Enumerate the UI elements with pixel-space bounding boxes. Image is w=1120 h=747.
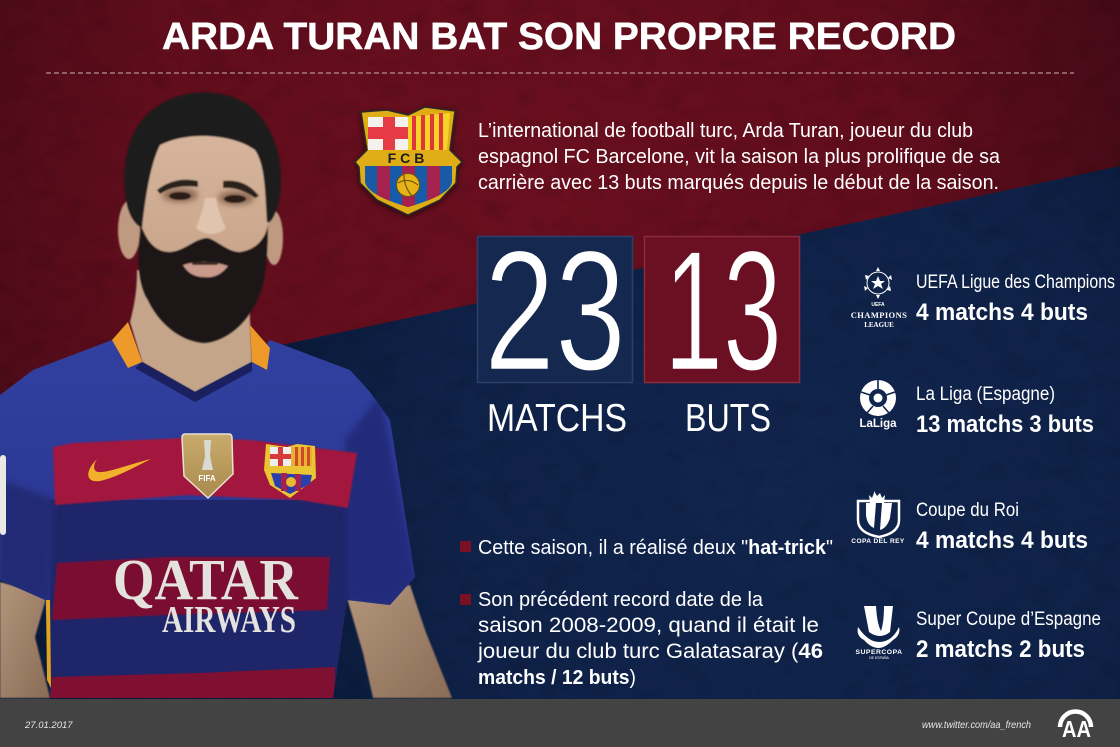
jersey (0, 340, 415, 700)
jersey side trim (46, 600, 51, 688)
icon: AA agency logo: AA (1062, 716, 1091, 742)
competition: La Liga (859, 380, 1094, 438)
bullet: hat-tricks: Cette saison, il a réalisé deux "hat-trick" (478, 537, 833, 559)
icon: La Liga ball (859, 380, 897, 430)
crest ball (396, 174, 420, 196)
stat box: matches (478, 215, 632, 440)
sponsor wordmark: QATAR (113, 547, 299, 612)
title: ARDA TURAN BAT SON PROPRE RECORD (162, 16, 956, 58)
competition name: Super Coupe d’Espagne (916, 609, 1101, 630)
sleeve patch (0, 455, 6, 535)
stat box: matches: 23 (484, 215, 626, 407)
background: navy diagonal field (0, 166, 1120, 700)
bullet: previous record: matchs / 12 buts) (478, 667, 636, 689)
competition name: La Liga (Espagne) (916, 384, 1055, 405)
competition figures: 4 matchs 4 buts (916, 527, 1088, 554)
bullet: previous record: joueur du club turc Galatasaray ( 46 (477, 639, 823, 663)
intro paragraph: carrière avec 13 buts marqués depuis le début de la saison. (478, 172, 999, 194)
bullet: previous record: Son précédent record date de la (478, 589, 764, 611)
ears (118, 201, 283, 265)
lips (183, 262, 228, 277)
source link: www.twitter.com/aa_french (922, 719, 1031, 731)
competition: Super Coupe (855, 606, 1101, 663)
crest FCB letters: FCB (388, 150, 428, 166)
icon: Copa del Rey trophy (851, 491, 905, 545)
bullet: previous record: saison 2008-2009, quand il était le (478, 613, 819, 637)
left arm (0, 582, 50, 698)
head (118, 92, 283, 343)
eyes (169, 192, 246, 203)
neck (130, 270, 252, 392)
icon: Champions League starball (851, 267, 907, 329)
sponsor wordmark: AIRWAYS (162, 599, 296, 641)
competition: Coupe du Roi (851, 491, 1088, 554)
bullet: previous record (460, 589, 823, 689)
FC Barcelona crest (355, 107, 462, 215)
beard (138, 225, 268, 343)
stat box: goals (644, 215, 800, 440)
intro paragraph: espagnol FC Barcelone, vit la saison la plus prolifique de sa (478, 146, 1001, 168)
icon: Champions League starball: UEFA (871, 302, 885, 308)
stat box: matches: MATCHS (487, 397, 627, 440)
sponsor wordmark (113, 547, 299, 641)
competition figures: 13 matchs 3 buts (916, 411, 1094, 438)
icon: La Liga ball: LaLiga (859, 418, 897, 430)
FIFA champion badge (182, 434, 233, 498)
nose (196, 198, 226, 234)
icon: Supercopa trophy: DE ESPAÑA (869, 655, 890, 660)
icon: Champions League starball: LEAGUE (864, 321, 894, 329)
crest shield stripes (365, 166, 455, 208)
player photo illustration (0, 92, 452, 700)
icon: Champions League starball: CHAMPIONS (851, 310, 907, 320)
icon: Supercopa trophy (855, 606, 903, 660)
icon: Copa del Rey trophy: COPA DEL REY (851, 538, 905, 545)
FIFA champion badge: FIFA (198, 474, 216, 483)
face (142, 135, 268, 325)
stat box: goals: 13 (664, 215, 782, 407)
icon: Supercopa trophy: SUPERCOPA (855, 649, 903, 656)
intro paragraph (478, 120, 1001, 194)
competition: Champions League (851, 267, 1115, 329)
nike swoosh (88, 459, 151, 481)
footer bar (0, 699, 1120, 747)
competition figures: 4 matchs 4 buts (916, 299, 1088, 326)
jersey crest (264, 444, 316, 498)
eyebrows (157, 180, 259, 198)
eye sockets (162, 188, 254, 205)
crest cross quarter (368, 117, 408, 150)
competition name: Coupe du Roi (916, 500, 1019, 521)
stat box: goals: BUTS (685, 397, 771, 440)
intro paragraph: L’international de football turc, Arda Turan, joueur du club (478, 120, 973, 142)
date: 27.01.2017 (24, 720, 73, 731)
hair (124, 92, 281, 228)
crest stripes quarter (408, 113, 450, 150)
right arm (347, 585, 452, 698)
collar (112, 322, 270, 370)
competition figures: 2 matchs 2 buts (916, 636, 1085, 663)
